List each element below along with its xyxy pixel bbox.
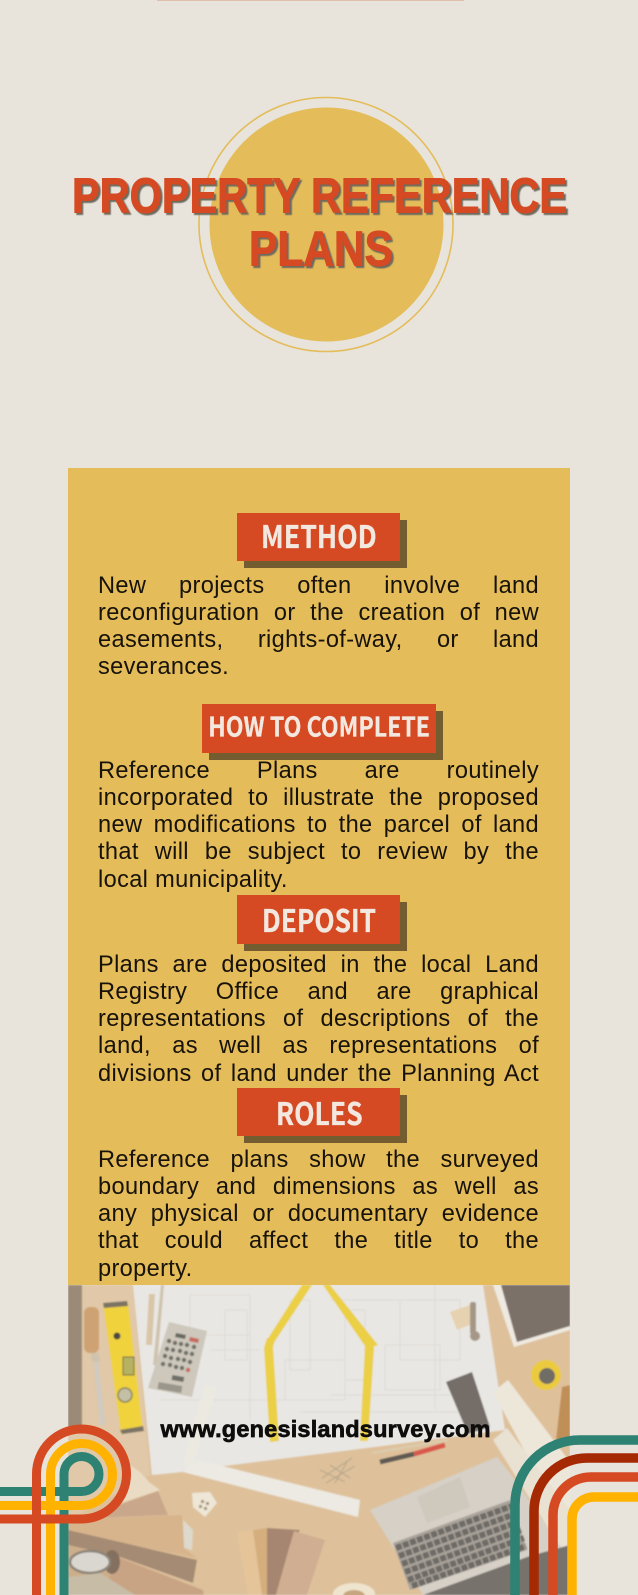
text: roles: property. — [98, 1256, 193, 1282]
text: deposit: divisions of land under the Planning Act — [98, 1061, 539, 1087]
text: roles: boundary and dimensions as well as — [98, 1174, 539, 1200]
text: how to complete — [98, 758, 539, 893]
website url: www.genesislandsurvey.com — [160, 1416, 490, 1442]
text: how to complete: incorporated to illustrate the proposed — [98, 785, 539, 811]
badge: roles — [237, 1088, 400, 1136]
text: roles: any physical or documentary evidence — [98, 1201, 539, 1227]
badge: how to complete: HOW TO COMPLETE — [208, 705, 430, 744]
badge: method: METHOD — [261, 512, 377, 557]
title: PLANS — [249, 222, 393, 276]
badge: how to complete — [202, 704, 436, 753]
level — [103, 1302, 143, 1434]
wood block — [556, 1385, 570, 1442]
text: roles — [98, 1147, 539, 1282]
laptop — [370, 1457, 570, 1595]
title circle emblem — [198, 96, 454, 352]
text: how to complete: new modifications to the parcel of land — [98, 812, 539, 838]
badge: deposit: DEPOSIT — [262, 896, 376, 941]
screwdriver — [84, 1307, 99, 1353]
paper rolls — [493, 1380, 570, 1510]
text: method: easements, rights-of-way, or land — [98, 627, 539, 653]
text: how to complete: Reference Plans are routinely — [98, 758, 539, 784]
phone — [446, 1372, 490, 1434]
key and wooden house — [450, 1305, 475, 1330]
paint can and brush — [104, 1550, 120, 1574]
panel: yellow content background — [68, 468, 570, 1285]
text: deposit — [98, 952, 539, 1087]
text: method: reconfiguration or the creation of new — [98, 600, 539, 626]
decorative loop: bottom left — [0, 1424, 131, 1595]
text: roles: that could affect the title to the — [98, 1228, 539, 1254]
text: deposit: Registry Office and are graphical — [98, 979, 539, 1005]
text: deposit: Plans are deposited in the local Land — [98, 952, 539, 978]
text: method: New projects often involve land — [98, 573, 539, 599]
tablet — [493, 1285, 570, 1347]
text: deposit: representations of descriptions of the — [98, 1006, 539, 1032]
paperclips — [320, 1458, 355, 1483]
small wooden house — [192, 1492, 217, 1517]
text: method: severances. — [98, 654, 229, 680]
calculator — [148, 1322, 207, 1397]
pencils — [372, 1440, 448, 1453]
text: method — [98, 573, 539, 680]
badge: roles: ROLES — [276, 1089, 363, 1134]
folding rule house — [264, 1285, 378, 1442]
text: how to complete: local municipality. — [98, 867, 288, 893]
title — [72, 168, 568, 276]
swatches — [237, 1530, 270, 1595]
white square ruler — [183, 1385, 217, 1468]
text: how to complete: that will be subject to review by the — [98, 839, 539, 865]
tape roll — [333, 1583, 375, 1595]
top edge sliver — [157, 0, 464, 1]
text: deposit: land, as well as representations of — [98, 1033, 539, 1059]
tape measure — [531, 1360, 561, 1390]
wood sample fan — [112, 1465, 160, 1506]
decorative curves: bottom right — [510, 1435, 638, 1595]
text: roles: Reference plans show the surveyed — [98, 1147, 539, 1173]
photo: desk with plans and tools — [68, 1285, 570, 1595]
